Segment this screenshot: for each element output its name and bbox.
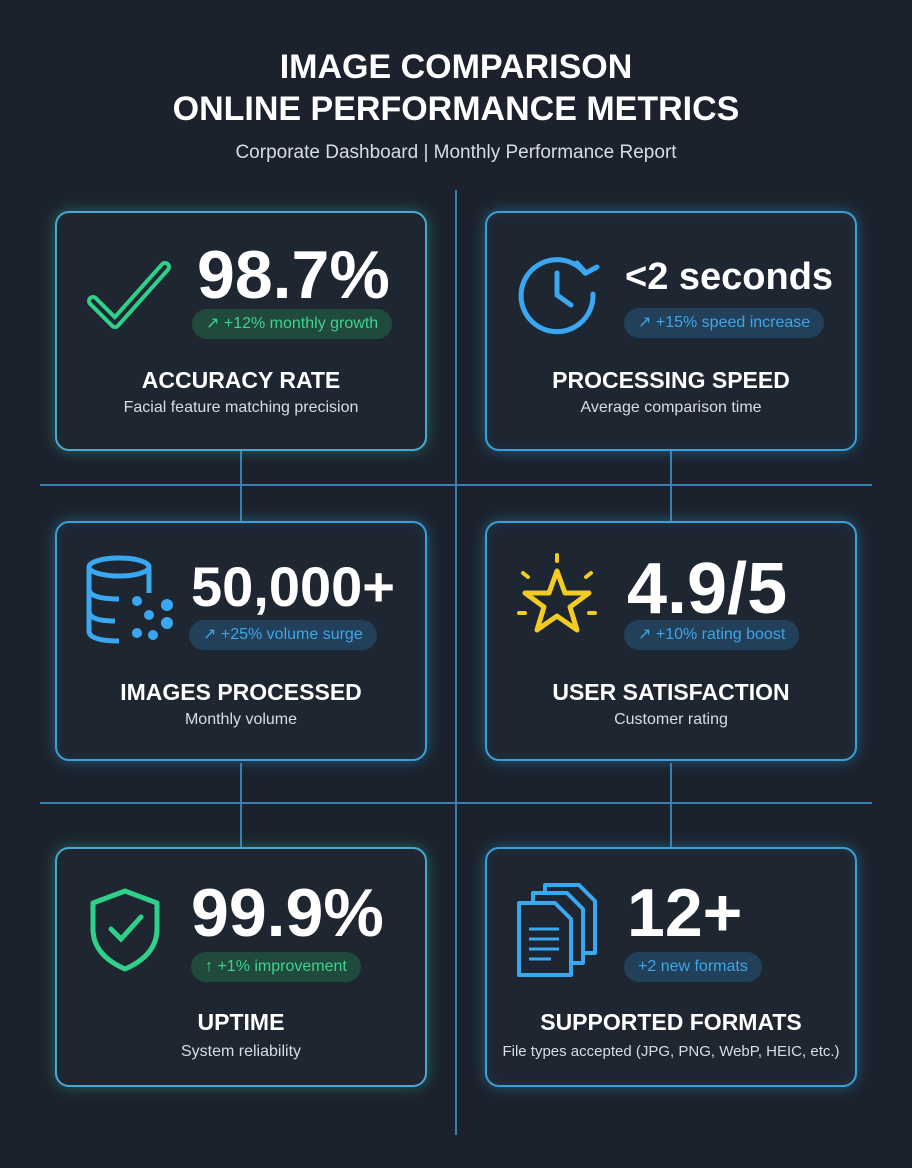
title <box>173 48 739 128</box>
desc: Average comparison time <box>580 399 762 416</box>
label: USER SATISFACTION <box>552 679 790 705</box>
pill <box>624 620 799 650</box>
subtitle: Corporate Dashboard | Monthly Performance Report <box>235 142 677 163</box>
icon: shield <box>90 888 160 972</box>
pill: ↗ +15% speed increase <box>638 314 810 331</box>
value: 98.7% <box>197 237 390 313</box>
pill: ↑ +1% improvement <box>205 958 347 975</box>
value: 99.9% <box>191 875 384 951</box>
desc: Facial feature matching precision <box>124 399 358 416</box>
label: SUPPORTED FORMATS <box>540 1009 802 1035</box>
value: 50,000+ <box>191 555 395 618</box>
desc: File types accepted (JPG, PNG, WebP, HEIC, etc.) <box>502 1043 840 1060</box>
pill <box>191 952 361 982</box>
icon: clock <box>518 257 600 334</box>
icon: check <box>87 261 171 329</box>
pill: ↗ +12% monthly growth <box>206 315 378 332</box>
pill <box>624 308 824 338</box>
desc: System reliability <box>181 1043 301 1060</box>
icon: star <box>517 553 597 632</box>
title: IMAGE COMPARISON <box>280 48 632 86</box>
title: ONLINE PERFORMANCE METRICS <box>173 90 739 128</box>
desc: Monthly volume <box>185 711 297 728</box>
label: PROCESSING SPEED <box>552 367 790 393</box>
panel: images <box>55 521 427 761</box>
panel: formats <box>485 847 857 1087</box>
panel: uptime <box>55 847 427 1087</box>
label: UPTIME <box>198 1009 284 1035</box>
panel: accuracy <box>55 211 427 451</box>
label: ACCURACY RATE <box>142 367 340 393</box>
pill: ↗ +10% rating boost <box>638 626 785 643</box>
pill <box>189 620 377 650</box>
panel: satisfaction <box>485 521 857 761</box>
value: 12+ <box>627 875 742 951</box>
pill <box>192 309 392 339</box>
value: 4.9/5 <box>627 549 787 629</box>
pill <box>624 952 762 982</box>
pill: +2 new formats <box>638 958 748 975</box>
label: IMAGES PROCESSED <box>120 679 362 705</box>
value: <2 seconds <box>625 256 833 298</box>
icon: documents <box>517 883 597 977</box>
icon: database <box>86 556 173 644</box>
desc: Customer rating <box>614 711 728 728</box>
pill: ↗ +25% volume surge <box>203 626 363 643</box>
panel: speed <box>485 211 857 451</box>
